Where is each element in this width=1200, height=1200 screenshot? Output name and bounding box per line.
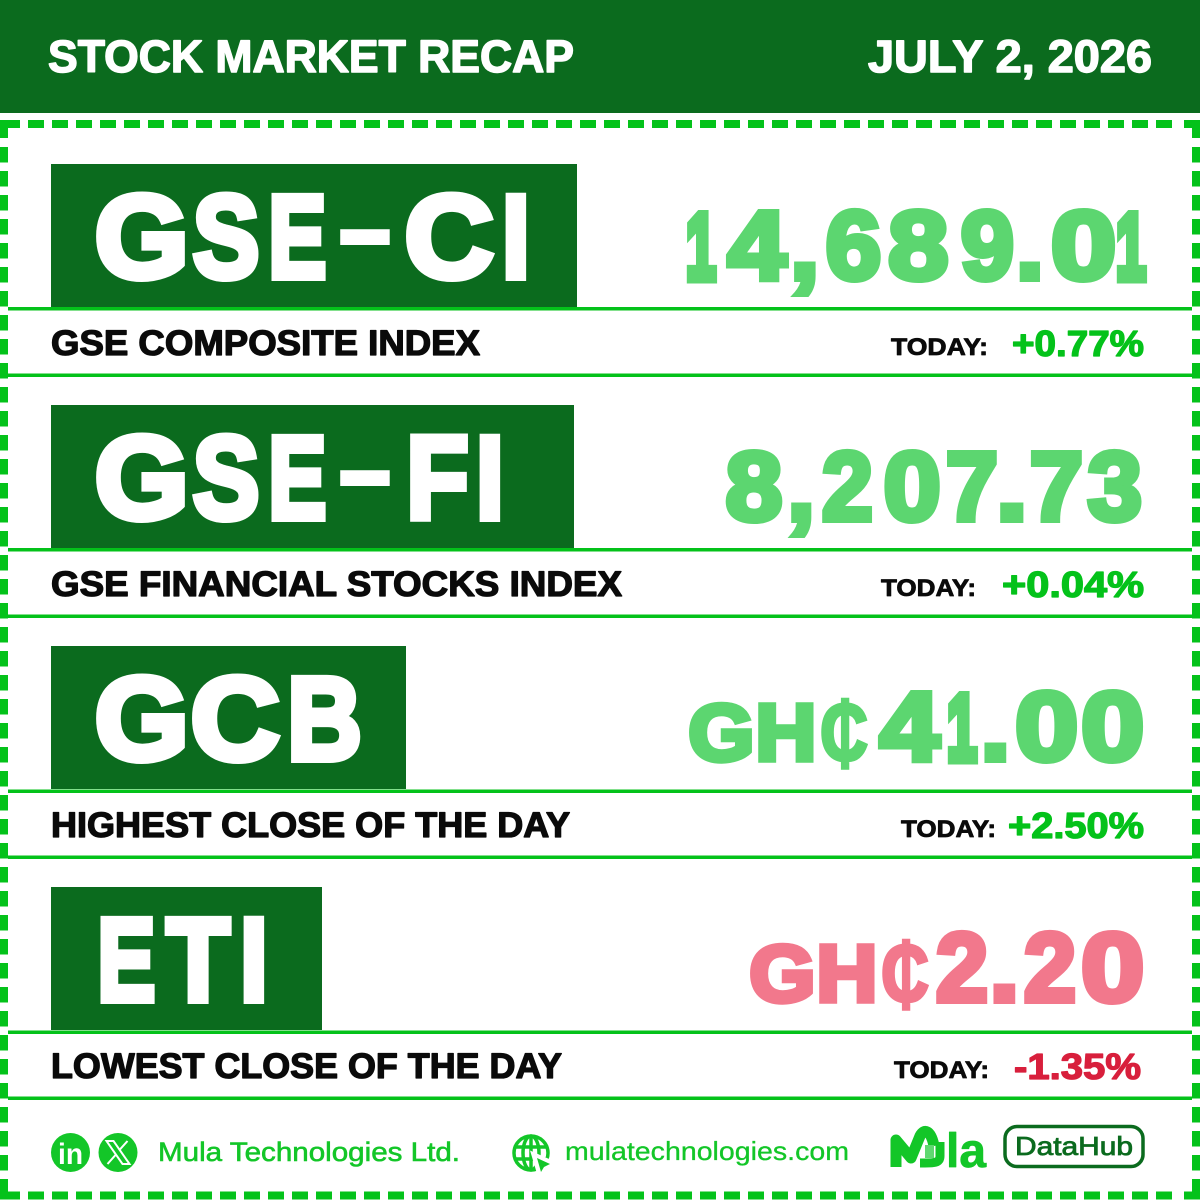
ticker box: GCB: G	[95, 654, 189, 786]
value: .	[990, 913, 1019, 1022]
today label: TODAY:	[894, 1057, 989, 1084]
ticker box: GSE-FI: G	[95, 412, 189, 544]
value: ₵	[881, 929, 929, 1018]
change: -1.35%	[1014, 1046, 1141, 1087]
value: 8	[726, 432, 782, 541]
ticker box: GSE-FI	[51, 404, 574, 548]
title: STOCK MARKET RECAP	[48, 31, 574, 82]
logo: DataHub	[1005, 1126, 1143, 1166]
ticker box: GSE-FI: I	[476, 412, 504, 544]
subtitle: GSE COMPOSITE INDEX	[51, 324, 481, 363]
value: G	[688, 688, 754, 777]
ticker box: GSE-CI: –	[339, 163, 391, 295]
ticker box: GCB: C	[191, 654, 280, 786]
date: JULY 2, 2026	[868, 31, 1152, 82]
value: G	[750, 929, 815, 1018]
value: 4	[880, 672, 939, 781]
logo: DataHub: DataHub	[1015, 1131, 1133, 1161]
footer	[51, 1125, 1143, 1178]
value: ₵	[820, 688, 868, 777]
value: 7	[1030, 432, 1083, 541]
ticker box: ETI: E	[97, 894, 155, 1026]
ticker box: GSE-CI: I	[502, 172, 530, 304]
ticker box: GSE-CI	[51, 163, 577, 307]
value: H	[816, 929, 877, 1018]
value: 4	[728, 191, 786, 300]
value: 0	[1051, 191, 1116, 300]
header band	[0, 0, 1200, 113]
value: 0	[1015, 672, 1078, 781]
value: H	[756, 688, 816, 777]
panel: ETI	[8, 887, 1192, 1100]
value: .	[1016, 191, 1044, 300]
value: .	[996, 432, 1028, 541]
value: 0	[1081, 913, 1144, 1022]
value: 2	[936, 913, 988, 1022]
panel: GSE-FI	[8, 404, 1192, 618]
value: ,	[790, 191, 819, 300]
today label: TODAY:	[901, 816, 996, 843]
change: +0.04%	[1002, 564, 1144, 605]
icon: globe	[514, 1136, 552, 1175]
ticker box: GSE-FI: –	[339, 404, 391, 536]
logo: Mula	[896, 1125, 986, 1178]
value: 2	[1024, 913, 1076, 1022]
subtitle: LOWEST CLOSE OF THE DAY	[51, 1047, 562, 1086]
change: +0.77%	[1012, 323, 1144, 364]
ticker box: ETI	[51, 887, 322, 1030]
value: 6	[826, 191, 881, 300]
subtitle: HIGHEST CLOSE OF THE DAY	[51, 806, 570, 845]
value: 1	[686, 194, 716, 299]
company name: Mula Technologies Ltd.	[158, 1137, 460, 1167]
ticker box: ETI: I	[240, 894, 268, 1026]
icon: linkedin: in	[58, 1138, 83, 1171]
value: 2	[822, 432, 873, 541]
value: 1	[947, 675, 977, 780]
ticker box: ETI: T	[166, 894, 230, 1026]
value: 3	[1088, 432, 1142, 541]
today label: TODAY:	[881, 575, 976, 602]
logo: Mula: la	[946, 1125, 986, 1178]
value: 8	[888, 191, 948, 300]
website: mulatechnologies.com	[565, 1136, 849, 1166]
panel: GCB	[8, 646, 1192, 859]
value: 1	[1116, 194, 1146, 299]
ticker box: GCB: B	[287, 654, 362, 786]
ticker box: GSE-CI: C	[405, 172, 494, 304]
value: .	[980, 672, 1010, 781]
ticker box: GSE-CI: G	[95, 172, 189, 304]
value: 0	[1081, 672, 1144, 781]
today label: TODAY:	[891, 334, 988, 361]
ticker box: GSE-CI: S	[193, 172, 260, 304]
subtitle: GSE FINANCIAL STOCKS INDEX	[51, 565, 623, 604]
icon: linkedin	[51, 1133, 90, 1172]
value: ,	[787, 432, 815, 541]
ticker box: GSE-FI: F	[406, 412, 469, 544]
value: 7	[946, 432, 998, 541]
ticker box: GSE-FI: E	[268, 412, 326, 544]
change: +2.50%	[1008, 805, 1144, 846]
ticker box: GCB	[51, 646, 406, 789]
value: 0	[884, 432, 941, 541]
ticker box: GSE-CI: E	[268, 172, 326, 304]
ticker box: GSE-FI: S	[193, 412, 260, 544]
icon: X	[98, 1133, 138, 1172]
panel: GSE-CI	[8, 163, 1192, 377]
value: 9	[961, 191, 1014, 300]
